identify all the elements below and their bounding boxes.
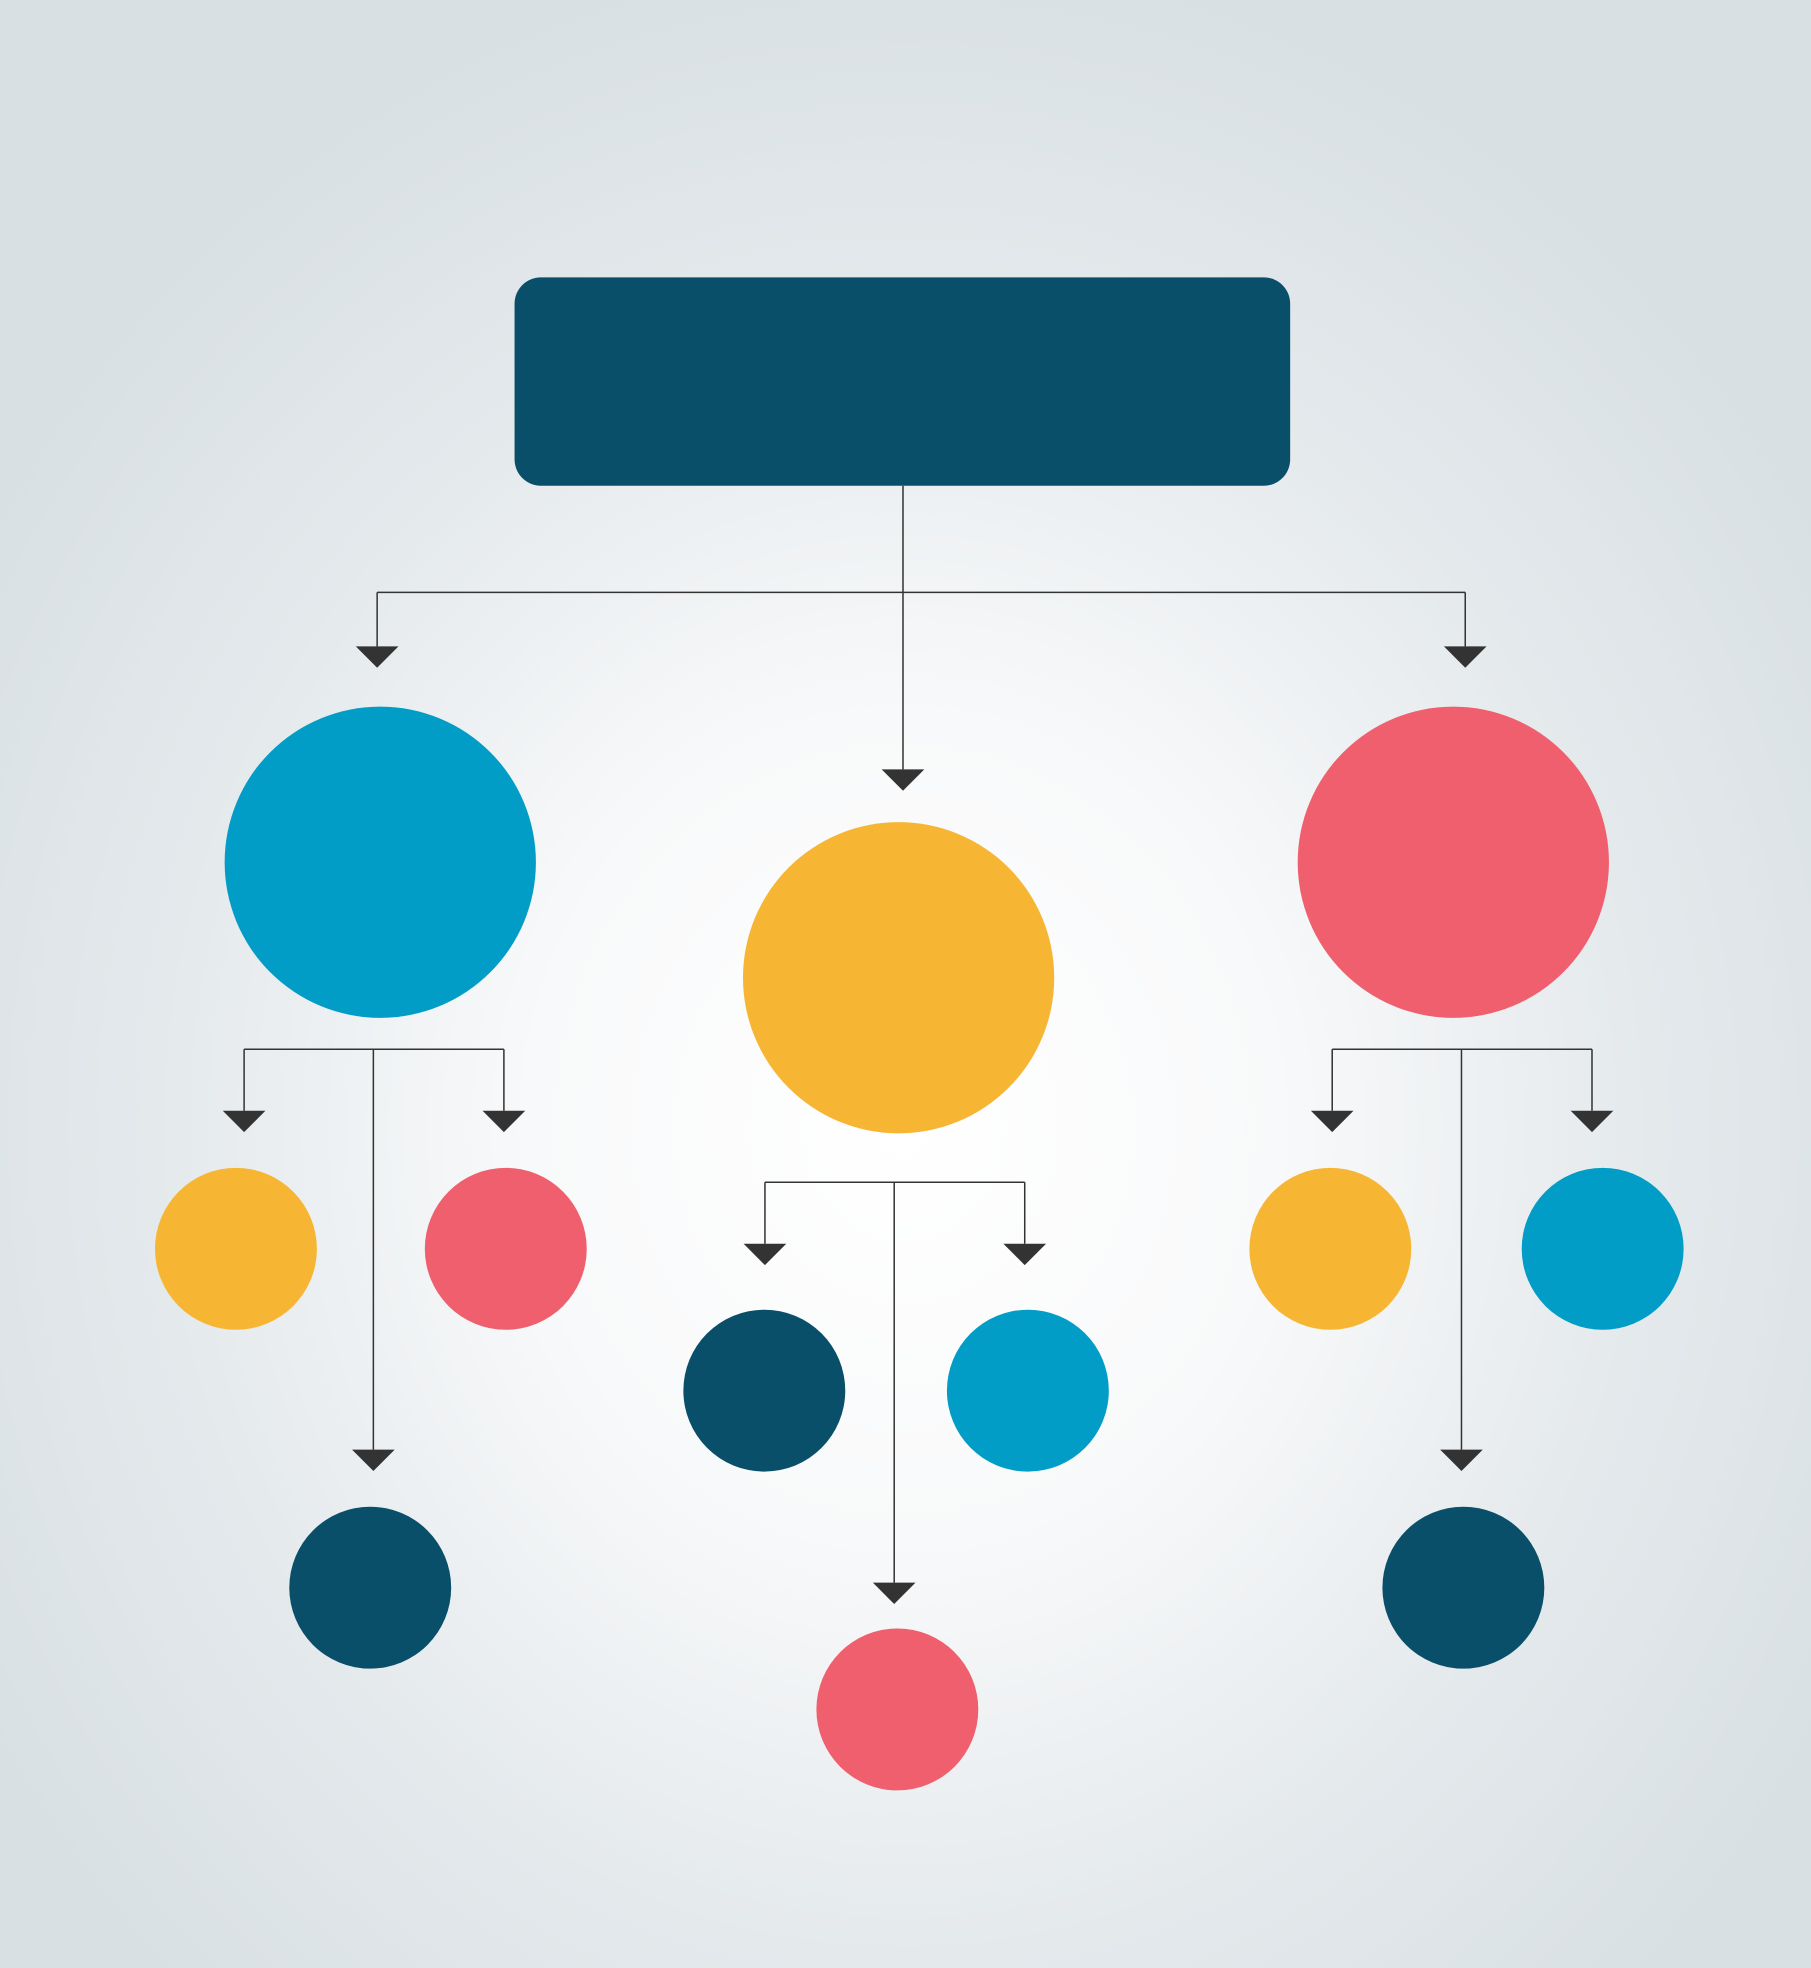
right children xyxy=(1249,1168,1684,1669)
connectors left xyxy=(223,1049,525,1471)
connectors right xyxy=(1311,1049,1613,1471)
circle: blue main xyxy=(225,707,536,1018)
left children xyxy=(155,1168,587,1669)
top box xyxy=(515,277,1290,486)
connectors from top box xyxy=(356,486,1487,791)
circle: yellow main xyxy=(743,822,1054,1133)
middle children xyxy=(683,1310,1109,1790)
circle: red main xyxy=(1298,707,1609,1018)
connectors middle xyxy=(744,1182,1046,1604)
